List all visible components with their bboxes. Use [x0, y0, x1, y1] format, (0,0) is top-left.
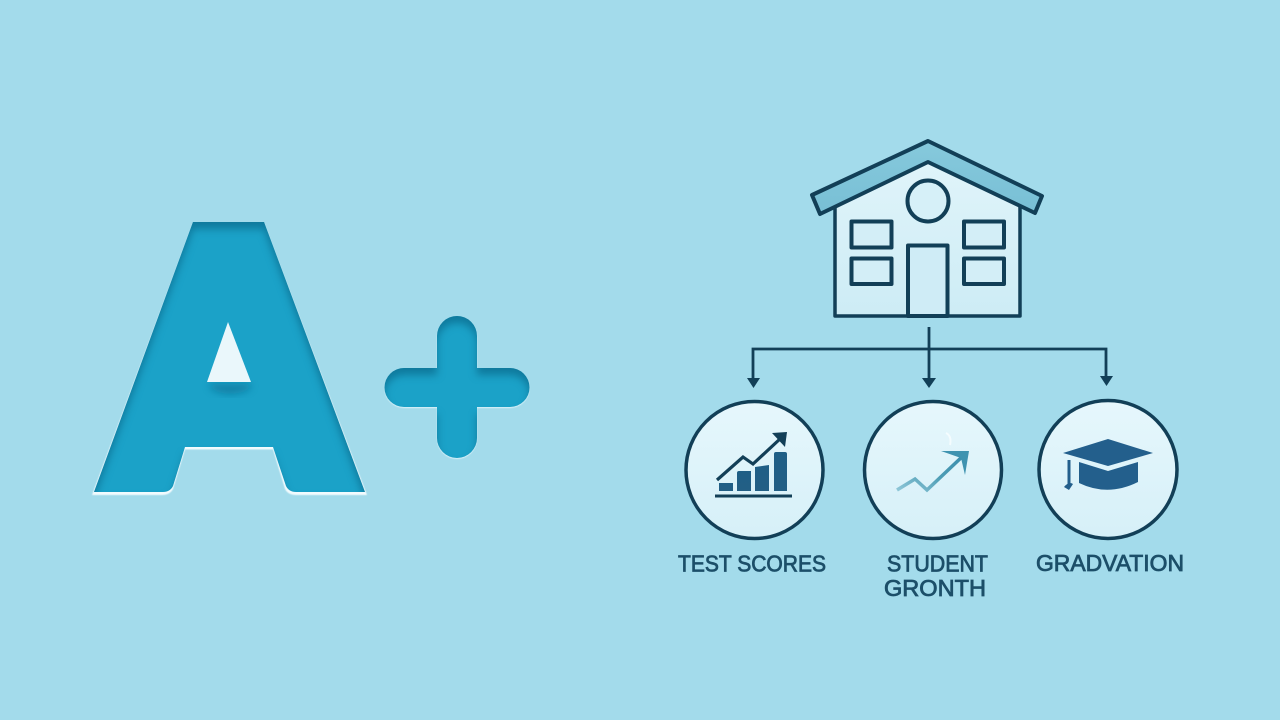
label: test scores: TEST SCORES [678, 550, 826, 576]
label: student growth: STUDENT [887, 550, 988, 576]
icon: graduation cap [1063, 439, 1153, 490]
letter A cutout [92, 222, 367, 495]
connector arrows [747, 327, 1113, 388]
windows right [964, 222, 1004, 284]
student growth item [864, 402, 1002, 601]
letter grade A plus cutout [92, 222, 530, 495]
counter triangle of A [207, 322, 251, 394]
plus sign cutout [384, 316, 530, 459]
icon: growth arrow [897, 433, 969, 490]
windows left [852, 222, 892, 284]
circle: student growth [864, 402, 1002, 538]
door [908, 246, 948, 316]
school body [835, 160, 1020, 316]
circle: test scores [686, 402, 823, 538]
label: graduation: GRADVATION [1036, 550, 1184, 576]
school roof [812, 141, 1042, 214]
test scores item [678, 402, 826, 576]
arrow heads [747, 376, 1113, 388]
graduation item [1036, 400, 1184, 576]
student growth item: GRONTH [884, 575, 986, 601]
school building icon [812, 141, 1042, 316]
round attic window [908, 180, 948, 222]
icon: bar chart with rising arrow [715, 432, 792, 498]
circle: graduation [1039, 400, 1177, 538]
